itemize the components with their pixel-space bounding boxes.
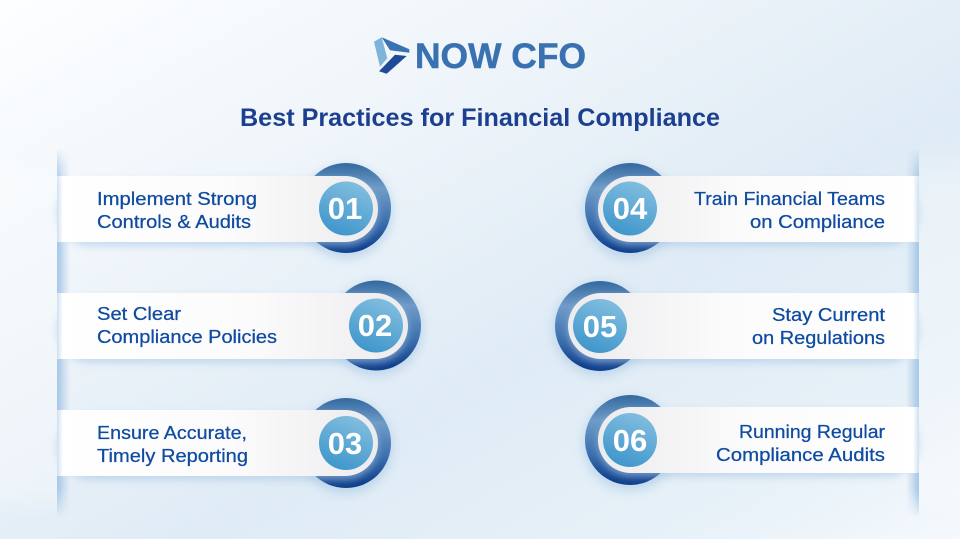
bar (57, 180, 378, 246)
bar (598, 180, 919, 246)
ring (299, 400, 393, 494)
item 03: 03 (328, 426, 362, 461)
title: Best Practices for Financial Compliance (240, 104, 720, 132)
label: Timely Reporting (97, 445, 248, 466)
item 02: 02 (358, 308, 392, 343)
label: Train Financial Teams (694, 188, 885, 209)
label: Compliance Policies (97, 326, 277, 347)
ring (329, 282, 423, 376)
item 01: 01 (328, 191, 362, 226)
item 05: 05 (583, 309, 617, 344)
ring (583, 397, 677, 491)
number badge (603, 182, 657, 236)
ring (553, 282, 647, 376)
label: Implement Strong (97, 188, 257, 209)
label: on Compliance (750, 211, 885, 232)
number badge (603, 413, 657, 467)
icon: logo mark (374, 37, 409, 74)
item 01 (57, 163, 393, 259)
logo (374, 37, 586, 76)
item 04 (583, 163, 919, 259)
item 02 (57, 280, 423, 376)
label: on Regulations (752, 327, 885, 348)
item 05 (553, 281, 919, 376)
label: Stay Current (772, 304, 885, 325)
bar (57, 414, 378, 480)
bar (598, 411, 919, 477)
item 06 (583, 395, 919, 491)
right margin panel (919, 180, 960, 230)
left strip edge over bars (57, 158, 62, 476)
item 04: 04 (613, 191, 648, 226)
item 03 (57, 398, 393, 494)
ring (299, 165, 393, 259)
bar (57, 297, 408, 363)
number badge (319, 182, 373, 236)
label: Running Regular (739, 421, 885, 442)
label: Compliance Audits (716, 444, 885, 465)
number badge (319, 416, 373, 470)
ring (583, 165, 677, 259)
left side strip under bars (57, 152, 68, 512)
right strip edge over bars (914, 176, 919, 508)
label: Controls & Audits (97, 211, 251, 232)
label: Set Clear (97, 303, 181, 324)
number badge (349, 298, 403, 352)
left margin panel (0, 148, 57, 517)
bar (568, 297, 919, 363)
item 06: 06 (613, 423, 647, 458)
right side strip under bars (908, 154, 919, 514)
logo wordmark: NOW CFO (415, 37, 586, 76)
number badge (573, 299, 627, 353)
label: Ensure Accurate, (97, 422, 247, 443)
